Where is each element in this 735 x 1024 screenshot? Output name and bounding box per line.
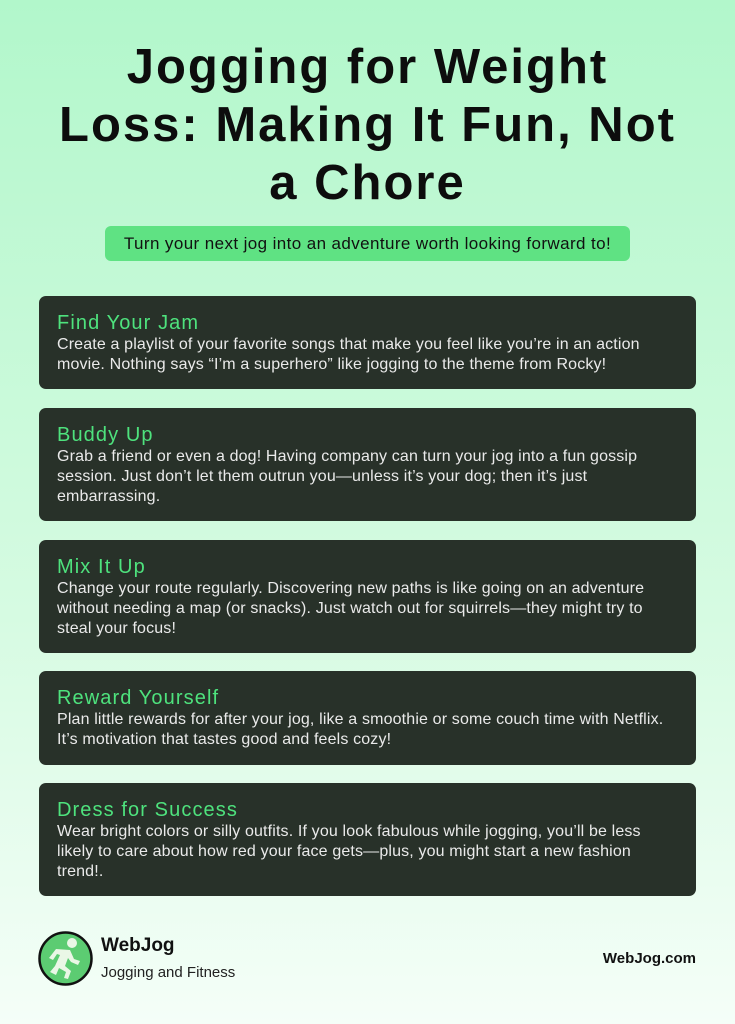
footer url: WebJog.com [603,950,696,967]
card: dress for success: Wear bright colors or silly outfits. If you look fabulous while jogging, you’ll be less [57,823,641,840]
card: reward yourself: Reward Yourself [57,687,219,709]
card: dress for success: likely to care about how red your face gets—plus, you might start a new fashion [57,843,631,860]
subtitle pill [105,226,630,261]
card: reward yourself: It’s motivation that tastes good and feels cozy! [57,731,391,748]
card: mix it up: Mix It Up [57,556,146,578]
card: buddy up: Grab a friend or even a dog! Having company can turn your jog into a fun gossip [57,448,637,465]
card: dress for success [39,783,696,896]
brand name: WebJog [101,935,175,956]
title: Loss: Making It Fun, Not [59,98,676,152]
card: find your jam: Create a playlist of your favorite songs that make you feel like you’re in an action [57,336,640,353]
card: mix it up [39,540,696,653]
title: Jogging for Weight [127,40,608,94]
card: find your jam: Find Your Jam [57,312,199,334]
card: mix it up: Change your route regularly. Discovering new paths is like going on an adventure [57,580,644,597]
card: buddy up: session. Just don’t let them outrun you—unless it’s your dog; then it’s just [57,468,587,485]
card: find your jam: movie. Nothing says “I’m a superhero” like jogging to the theme from Rocky! [57,356,606,373]
card: dress for success: Dress for Success [57,799,238,821]
title: a Chore [269,156,466,210]
icon: runner [38,931,93,986]
footer logo [38,931,235,986]
card: buddy up [39,408,696,521]
title [59,40,676,210]
card: buddy up: Buddy Up [57,424,154,446]
card: reward yourself: Plan little rewards for after your jog, like a smoothie or some couch time with Netflix. [57,711,663,728]
card: dress for success: trend!. [57,863,103,880]
subtitle pill: Turn your next jog into an adventure worth looking forward to! [124,234,611,253]
card: reward yourself [39,671,696,765]
card: mix it up: steal your focus! [57,620,176,637]
card: buddy up: embarrassing. [57,488,160,505]
card: find your jam [39,296,696,389]
card: mix it up: without needing a map (or snacks). Just watch out for squirrels—they might try to [57,600,643,617]
tagline: Jogging and Fitness [101,964,235,981]
